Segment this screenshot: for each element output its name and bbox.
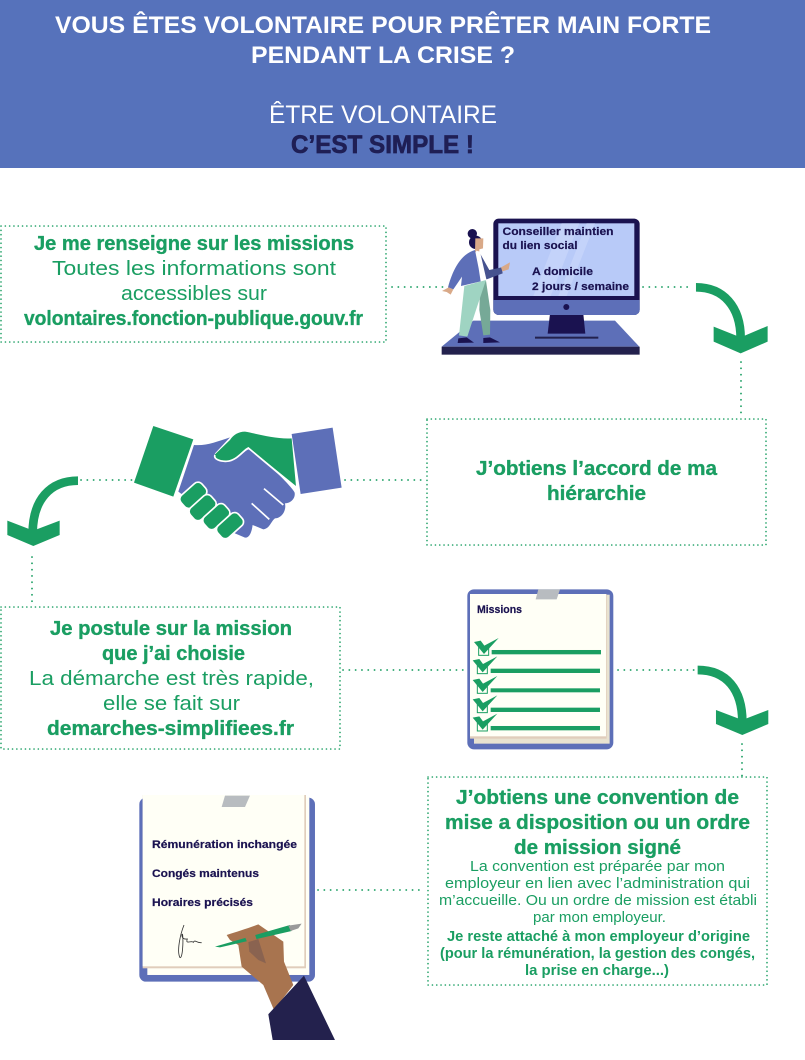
panel: step 2 hierarchy approval: J’obtiens l’accord de ma bbox=[476, 458, 718, 480]
header banner bbox=[0, 0, 805, 168]
panel: step 4 convention: (pour la rémunération, la gestion des congés, bbox=[440, 945, 755, 962]
title bbox=[55, 11, 711, 69]
subtitle bbox=[269, 100, 497, 159]
icon: handshake bbox=[134, 426, 342, 541]
screen text: Conseiller maintien bbox=[502, 226, 614, 238]
panel: step 3 apply: elle se fait sur bbox=[103, 693, 240, 715]
panel: step 4 convention: mise a disposition ou un ordre bbox=[445, 812, 750, 834]
panel: step 1 information: Je me renseigne sur les missions bbox=[34, 233, 354, 255]
panel: step 3 apply: La démarche est très rapide, bbox=[29, 668, 314, 690]
panel: step 4 convention: Je reste attaché à mon employeur d’origine bbox=[447, 928, 750, 945]
icon: missions clipboard: Missions bbox=[477, 604, 522, 616]
icon: signed contract clipboard: Horaires précisés bbox=[152, 897, 253, 909]
panel: step 2 hierarchy approval bbox=[427, 419, 766, 545]
icon: signed contract clipboard: Rémunération inchangée bbox=[152, 839, 297, 851]
icon: presenter and monitor bbox=[442, 219, 640, 355]
screen text: A domicile bbox=[532, 266, 593, 278]
panel: step 3 apply: que j’ai choisie bbox=[102, 643, 245, 665]
panel: step 4 convention: par mon employeur. bbox=[533, 909, 666, 926]
panel: step 3 apply bbox=[1, 607, 340, 749]
signature bbox=[179, 925, 202, 958]
panel: step 1 information bbox=[1, 226, 386, 342]
subtitle: C’EST SIMPLE ! bbox=[291, 131, 474, 159]
panel: step 4 convention: employeur en lien avec l’administration qui bbox=[445, 875, 750, 892]
screen text bbox=[502, 226, 629, 293]
icon: signed contract clipboard: Congés maintenus bbox=[152, 868, 259, 880]
panel: step 1 information: accessibles sur bbox=[121, 283, 267, 305]
icon: person bbox=[442, 229, 510, 343]
panel: step 4 convention: la prise en charge...) bbox=[525, 962, 669, 979]
icon: signed contract clipboard bbox=[139, 795, 335, 1040]
icon: missions clipboard bbox=[467, 589, 613, 749]
panel: step 4 convention: m’accueille. Ou un ordre de mission est établi bbox=[439, 892, 757, 909]
panel: step 4 convention: de mission signé bbox=[514, 837, 681, 859]
subtitle: ÊTRE VOLONTAIRE bbox=[269, 100, 497, 129]
panel: step 3 apply: Je postule sur la mission bbox=[50, 618, 292, 640]
panel: step 2 hierarchy approval: hiérarchie bbox=[547, 483, 646, 505]
panel: step 1 information: volontaires.fonction-publique.gouv.fr bbox=[24, 308, 363, 330]
arrow: handshake to step 3 bbox=[7, 481, 78, 546]
panel: step 1 information: Toutes les informations sont bbox=[52, 258, 337, 280]
title: PENDANT LA CRISE ? bbox=[251, 42, 515, 69]
icon: writing hand bbox=[215, 924, 335, 1040]
screen text: du lien social bbox=[502, 240, 578, 252]
panel: step 3 apply: demarches-simplifiees.fr bbox=[47, 718, 294, 740]
screen text: 2 jours / semaine bbox=[532, 281, 629, 293]
title: VOUS ÊTES VOLONTAIRE POUR PRÊTER MAIN FORTE bbox=[55, 11, 711, 39]
panel: step 4 convention bbox=[428, 777, 767, 985]
panel: step 4 convention: La convention est préparée par mon bbox=[470, 858, 725, 875]
panel: step 4 convention: J’obtiens une convention de bbox=[456, 787, 739, 809]
arrow: clipboard to step 4 bbox=[698, 670, 768, 735]
arrow: monitor to step 2 bbox=[696, 287, 768, 353]
